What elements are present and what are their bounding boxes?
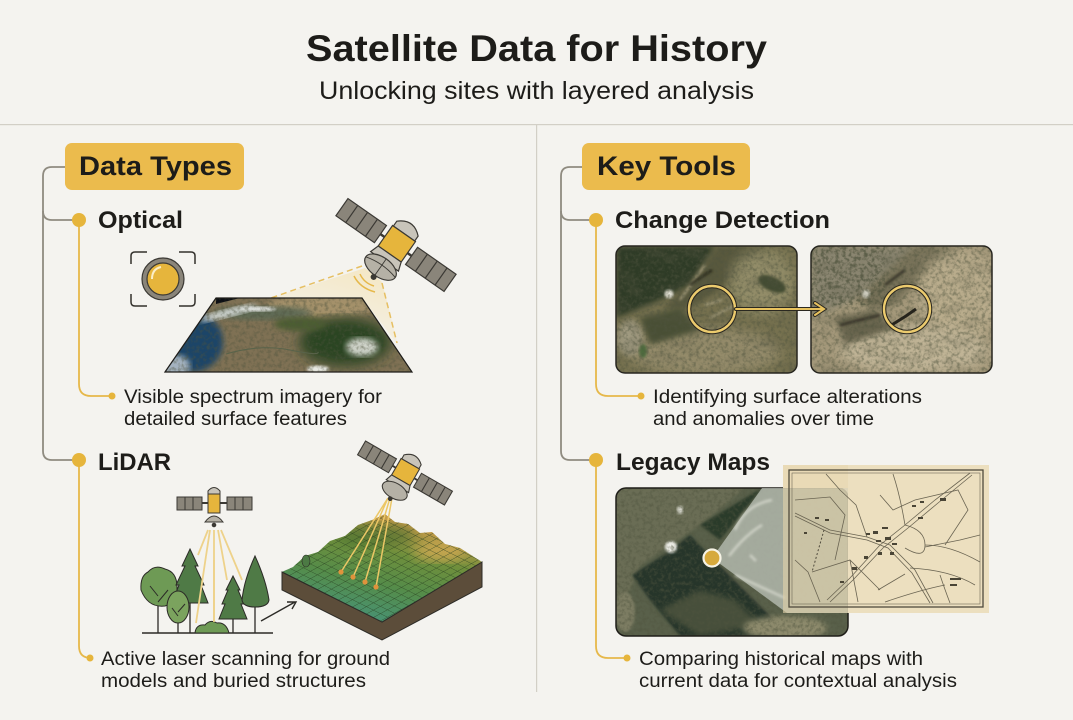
arrow: before to after [736, 303, 824, 315]
satellite: terrain scan [346, 431, 458, 525]
subheading: lidar: LiDAR [98, 449, 171, 476]
laser beams on terrain [338, 498, 392, 590]
title: Satellite Data for History [306, 28, 767, 69]
description: optical [108, 387, 383, 430]
image: before [616, 246, 797, 376]
image: current satellite [615, 488, 848, 640]
description: optical: detailed surface features [124, 409, 347, 430]
subheading: legacy maps: Legacy Maps [616, 449, 770, 476]
tree connector lines: key tools [561, 167, 641, 658]
heading tag: data types: Data Types [79, 151, 232, 181]
focus point [704, 550, 720, 566]
description: legacy maps: Comparing historical maps with [639, 649, 923, 670]
description: legacy maps [624, 649, 957, 692]
subtitle: Unlocking sites with layered analysis [319, 77, 754, 105]
description: legacy maps: current data for contextual analysis [639, 671, 957, 692]
panel: key tools [561, 143, 1002, 692]
historical map [783, 465, 989, 613]
focus cone [712, 488, 848, 613]
icon: forest [141, 549, 273, 633]
description: lidar: Active laser scanning for ground [101, 649, 390, 670]
heading tag: data types [65, 143, 244, 190]
terrain model [282, 514, 482, 640]
scan cone [271, 266, 398, 345]
satellite: lidar nadir [177, 488, 252, 527]
icon: camera lens [131, 252, 195, 306]
subheading: change detection: Change Detection [615, 207, 830, 234]
subheading: optical: Optical [98, 207, 183, 234]
description: optical: Visible spectrum imagery for [124, 387, 383, 408]
heading tag: key tools [582, 143, 750, 190]
satellite: optical [318, 186, 465, 317]
description: change detection [638, 387, 922, 430]
satellite image: earth [164, 297, 414, 373]
heading tag: key tools: Key Tools [597, 151, 736, 181]
description: change detection: Identifying surface alterations [653, 387, 922, 408]
description: change detection: and anomalies over time [653, 409, 874, 430]
image: after [811, 246, 1002, 374]
laser beams over forest [198, 530, 242, 622]
arrow: forest to terrain [261, 602, 296, 621]
description: lidar [86, 649, 390, 692]
tree connector lines: data types [43, 167, 112, 658]
laser beams front [196, 556, 214, 623]
description: lidar: models and buried structures [101, 671, 366, 692]
panel: data types [43, 143, 490, 692]
